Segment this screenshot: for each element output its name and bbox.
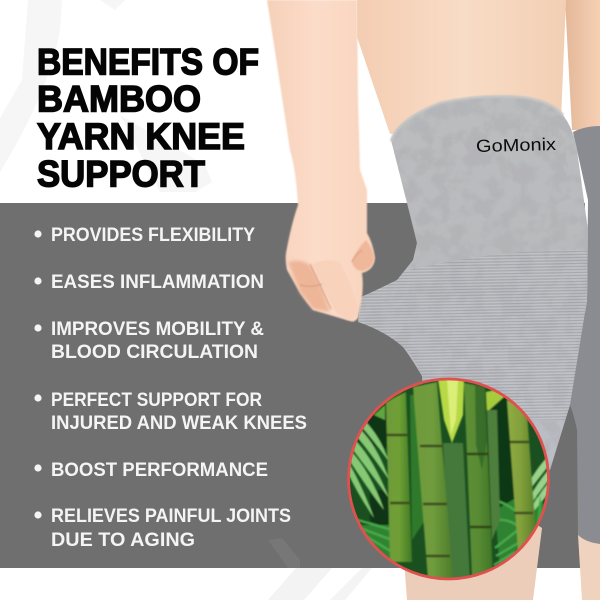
bullet: mobility (34, 318, 264, 363)
bullet: joints: DUE TO AGING (51, 529, 195, 551)
gray text panel (0, 203, 585, 568)
right leg (565, 0, 600, 600)
stalk 3 (464, 383, 493, 578)
thumb (312, 260, 358, 320)
bullet: support: PERFECT SUPPORT FOR (51, 389, 262, 411)
arm (267, 0, 375, 322)
brand logo: GoMonix (476, 134, 557, 156)
stalk 2 (413, 382, 453, 580)
main leg lower skin (404, 500, 542, 600)
shaded fingers (288, 261, 330, 312)
bullet: inflammation: EASES INFLAMMATION (51, 271, 264, 293)
stalk 4 (507, 400, 536, 550)
stalk 1 (386, 392, 412, 562)
bullet: support (34, 389, 307, 434)
knuckle (352, 240, 374, 271)
right leg lower skin (578, 535, 600, 600)
bullet: support: INJURED AND WEAK KNEES (51, 412, 307, 434)
sleeve body (358, 96, 588, 480)
ribbed band (350, 250, 590, 420)
back stalks (443, 443, 470, 580)
bamboo photo circle (345, 379, 550, 580)
panel watermark chevron (268, 538, 300, 568)
sleeve top hem (391, 96, 563, 141)
title: BAMBOO (37, 78, 201, 120)
benefits list (34, 224, 307, 551)
dark background patches (357, 398, 392, 450)
title: SUPPORT (37, 154, 205, 194)
main leg thigh (357, 0, 566, 134)
bullet: mobility: IMPROVES MOBILITY & (51, 318, 264, 340)
bullet: joints (34, 505, 291, 551)
title: YARN KNEE (37, 116, 245, 157)
sleeve knit mottling (394, 119, 588, 466)
bullet: performance: BOOST PERFORMANCE (51, 459, 268, 481)
right leg skin (565, 0, 600, 130)
title: BENEFITS OF (37, 42, 259, 82)
background watermark chevrons (0, 0, 372, 600)
bullet: mobility: BLOOD CIRCULATION (51, 341, 258, 363)
finger creases (300, 250, 362, 309)
foliage greens (410, 395, 425, 540)
circle border (348, 379, 548, 579)
bullet: flexibility: PROVIDES FLEXIBILITY (51, 224, 255, 246)
bullet: joints: RELIEVES PAINFUL JOINTS (51, 505, 291, 527)
fronds right (530, 458, 548, 511)
fronds lower (358, 500, 520, 565)
arm and hand (267, 0, 375, 322)
knee sleeve (350, 95, 590, 485)
fronds left (348, 418, 389, 518)
bright leaves (438, 379, 464, 443)
title (37, 42, 259, 194)
right leg sleeve (570, 126, 600, 544)
